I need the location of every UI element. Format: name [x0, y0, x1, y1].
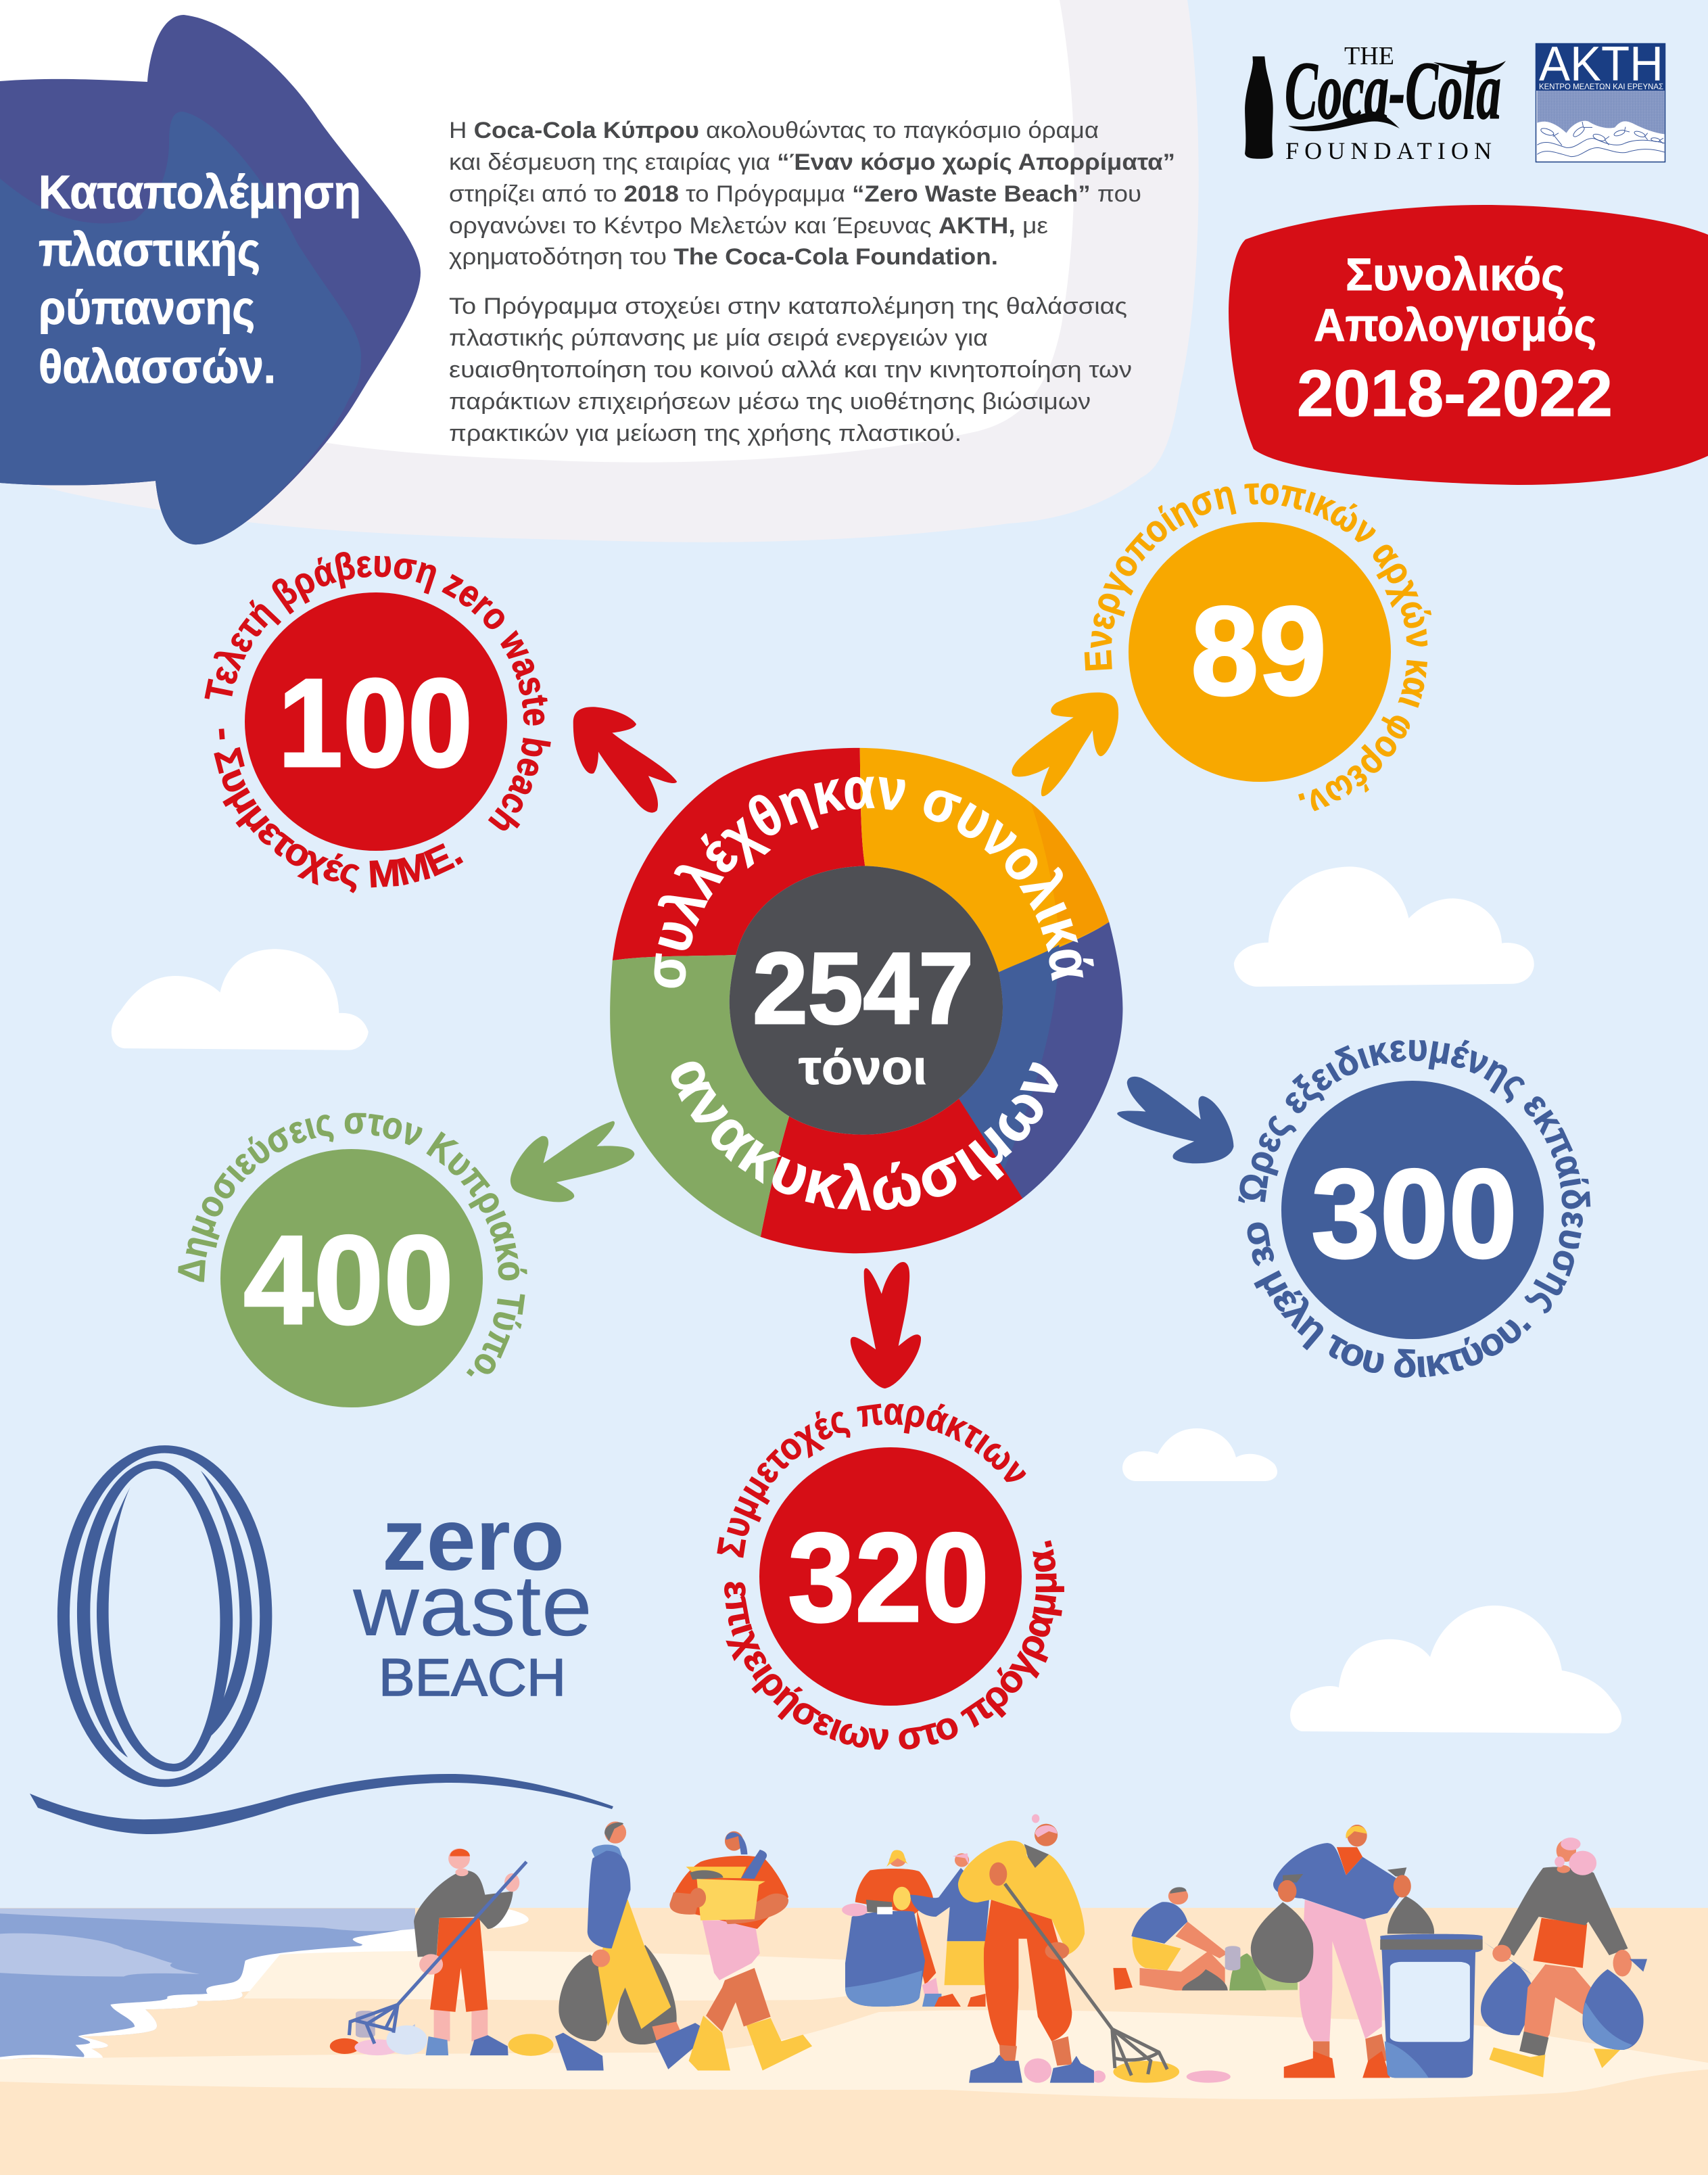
arrow: to 300 [1117, 1077, 1233, 1163]
text block: intro: πλαστικής ρύπανσης με μία σειρά ενεργειών για [449, 325, 988, 351]
background panel: white blob [0, 0, 1074, 463]
stat: 320 [717, 1403, 1064, 1750]
logo: The Coca-Cola Foundation [1245, 42, 1506, 164]
stat: 300: Ώρες εξειδικευμένης εκπαίδευσης [1238, 1039, 1590, 1313]
panel: summary red badge: Συνολικός [1346, 249, 1565, 300]
donut segments [610, 748, 1122, 1253]
stat: 320: επιχειρήσειων στο πρόγραμμα. [724, 1541, 1064, 1750]
heading: title: ρύπανσης [39, 281, 255, 334]
text block: intro: Η Coca-Cola Κύπρου ακολουθώντας το παγκόσμιο όραμα [449, 118, 1099, 143]
stat: 300: 300 [1311, 1143, 1517, 1284]
logo: AKTH [1536, 37, 1665, 162]
text block: intro: οργανώνει το Κέντρο Μελετών και Έρευνας ΑΚΤΗ, με [449, 213, 1048, 239]
logo: AKTH: ΚΕΝΤΡΟ ΜΕΛΕΤΩΝ ΚΑΙ ΕΡΕΥΝΑΣ [1539, 82, 1663, 91]
logo: zero waste beach mark: BEACH [379, 1647, 566, 1707]
text block: intro [449, 118, 1175, 446]
arrow: to 100 [573, 707, 677, 813]
illustration: person with rake in yellow jacket [958, 1814, 1231, 2083]
sand light bands [0, 1951, 1708, 2099]
arrow: to 320 [851, 1262, 921, 1388]
text block: intro: χρηματοδότηση του The Coca-Cola Foundation. [449, 244, 998, 270]
logo: AKTH: ΑΚΤΗ [1539, 37, 1663, 91]
illustration: person carrying yellow box [669, 1831, 812, 2071]
heading: title: θαλασσών. [39, 340, 276, 393]
panel: summary red badge: Απολογισμός [1314, 300, 1596, 351]
heading: title [39, 166, 361, 393]
logo: The Coca-Cola Foundation: THE [1344, 42, 1394, 70]
stat: 300: σε μέλη του δικτύου. [1247, 1223, 1532, 1378]
stat: 400: Δημοσιεύσεις στον Κυπριακό Τύπο. [178, 1113, 527, 1377]
heading: title: Καταπολέμηση [39, 166, 361, 218]
logo words: zero [382, 1490, 565, 1589]
background panel: grey blob [0, 0, 1199, 542]
illustration: person with rake in grey sweater [330, 1848, 554, 2056]
donut ring text bottom: ανακυκλώσιμων [671, 1062, 1058, 1211]
stat: 100: Τελετή βράβευση zero waste beach [204, 552, 551, 831]
panel: summary red badge [1229, 205, 1708, 485]
logo: zero waste beach mark: waste [352, 1558, 592, 1654]
chart: central donut [610, 748, 1122, 1254]
text block: intro: Το Πρόγραμμα στοχεύει στην καταπολέμηση της θαλάσσιας [449, 294, 1127, 319]
text block: intro: ευαισθητοποίηση του κοινού αλλά και την κινητοποίηση των [449, 357, 1132, 383]
beach sand [0, 1908, 1708, 2175]
zero rings [64, 1449, 266, 1783]
text block: intro: πρακτικών για μείωση της χρήσης πλαστικού. [449, 421, 962, 446]
heading: title: πλαστικής [39, 223, 260, 276]
stat: 320: Συμμετοχές παράκτιων [717, 1403, 1026, 1558]
donut ring text top: συλλέχθηκαν συνολικά [655, 776, 1094, 987]
panel: summary red badge: 2018-2022 [1297, 356, 1613, 430]
stat: 89: 89 [1191, 580, 1327, 722]
waste bin [1380, 1934, 1483, 2078]
logo: The Coca-Cola Foundation: FOUNDATION [1285, 137, 1492, 164]
donut number: 2547 [753, 931, 974, 1045]
stat: 400: 400 [243, 1209, 454, 1351]
arrow: to 400 [511, 1121, 634, 1202]
cloud right [1234, 866, 1534, 987]
wave under logo [30, 1774, 613, 1834]
illustration: person with black bags at bin [1251, 1825, 1483, 2078]
cloud large [1290, 1606, 1621, 1733]
stat: 100: - Συμμετοχές ΜΜΕ. [214, 728, 464, 893]
arrow: to 89 [1012, 693, 1118, 796]
illustration: person with blue bags [1481, 1838, 1647, 2078]
donut unit: τόνοι [799, 1041, 927, 1095]
sea [0, 1908, 529, 2092]
stat: 89: Ενεργοποίηση τοπικών αρχών και φορέων. [1085, 483, 1432, 812]
cloud left [112, 949, 369, 1050]
illustration: person in cap and blue shirt [910, 1853, 989, 2007]
stat: 320: 320 [788, 1507, 989, 1648]
illustration: crouching person [1113, 1887, 1298, 1990]
illustration: person holding blue bag [842, 1850, 941, 2007]
text block: intro: στηρίζει από το 2018 το Πρόγραμμα “Zero Waste Beach” που [449, 181, 1141, 207]
illustration: person with hood and black bags [555, 1821, 711, 2071]
text block: intro: και δέσμευση της εταιρίας για “Έναν κόσμο χωρίς Απορρίματα” [449, 149, 1175, 175]
stat: 100: 100 [278, 653, 473, 793]
logo: zero waste beach mark [64, 1449, 592, 1783]
text block: intro: παράκτιων επιχειρήσεων μέσω της υιοθέτησης βιώσιμων [449, 389, 1091, 415]
cloud small [1122, 1428, 1277, 1481]
logo: The Coca-Cola Foundation: Coca-Cola [1285, 45, 1501, 137]
title arrow shape [0, 15, 421, 544]
